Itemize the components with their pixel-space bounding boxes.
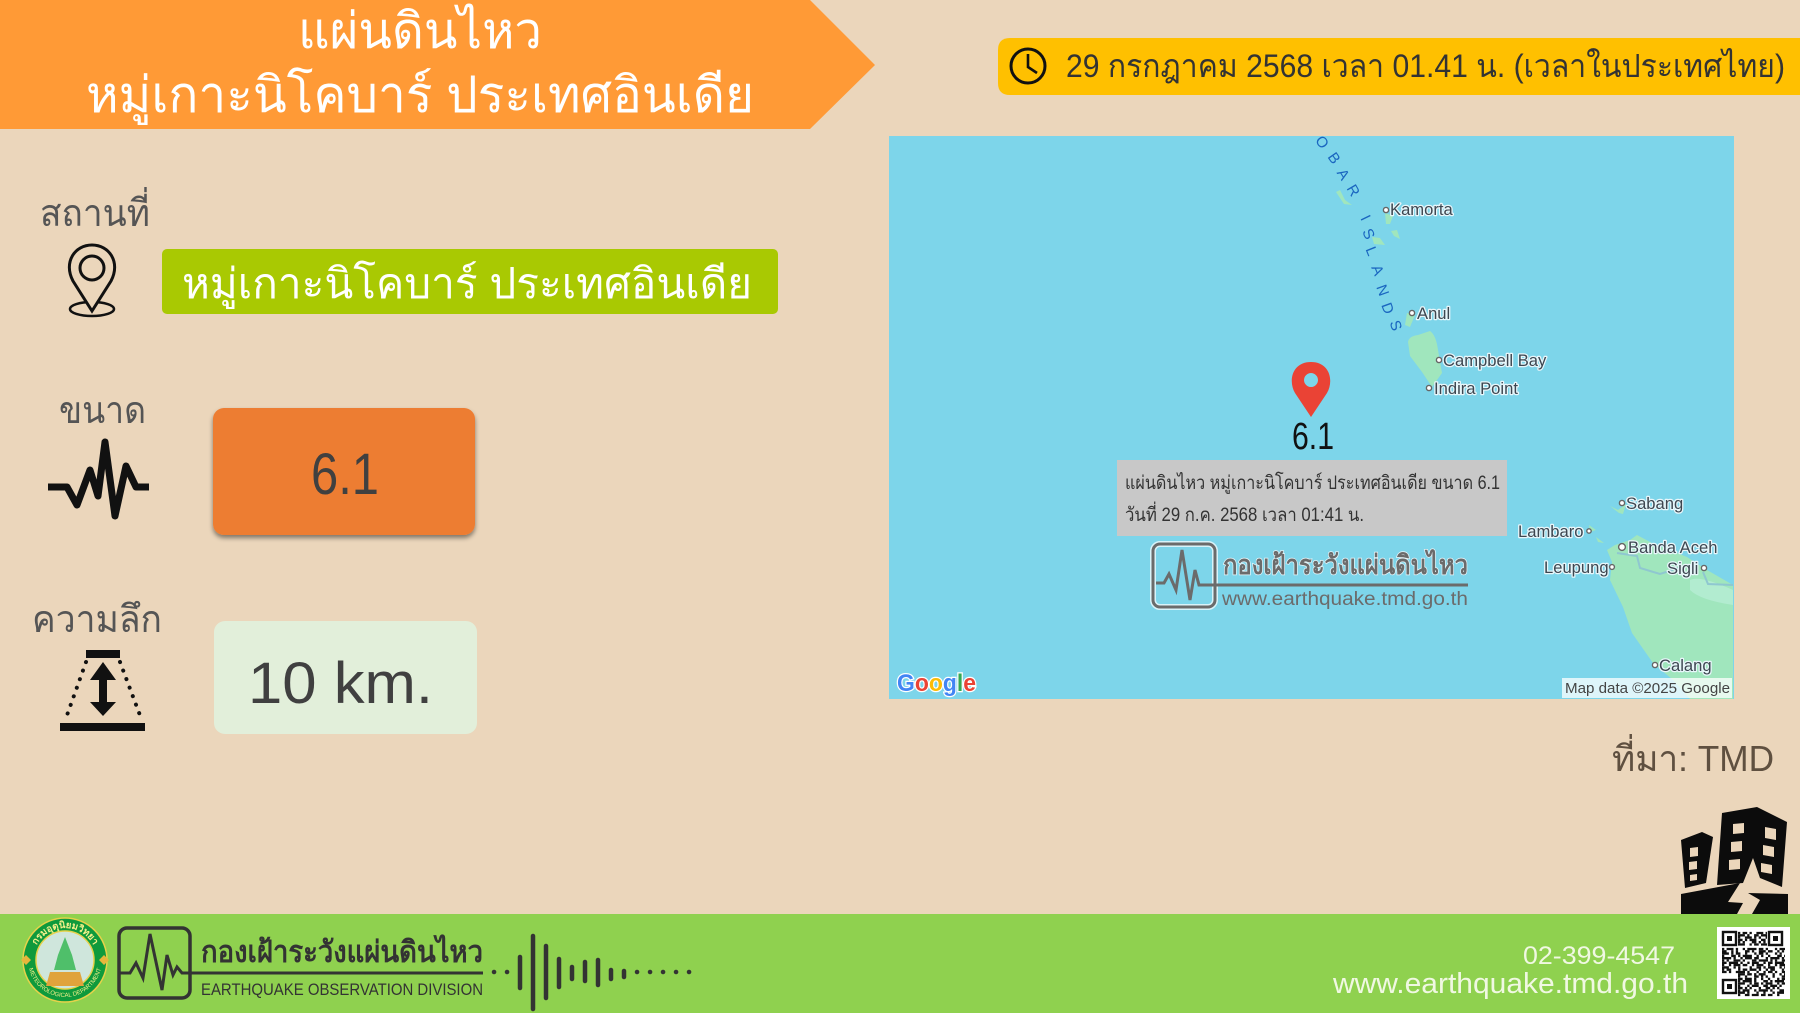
- map watermark logo: www.earthquake.tmd.go.th: [1221, 589, 1468, 610]
- label: Nicobar Islands arc: L: [1362, 244, 1381, 258]
- icon: collapsed building: [1681, 807, 1788, 914]
- place labels: Calang: [1659, 656, 1712, 675]
- google logo: Google: [897, 670, 976, 697]
- phone number: 02-399-4547: [1523, 942, 1675, 970]
- magnitude value: 6.1: [311, 442, 379, 507]
- map watermark logo: กองเฝ้าระวังแผ่นดินไหว: [1223, 549, 1468, 580]
- icon: earthquake pin: [1292, 362, 1330, 417]
- place labels: Lambaro: [1518, 522, 1584, 541]
- place labels: Anul: [1417, 304, 1450, 323]
- depth value: 10 km.: [248, 651, 433, 716]
- place labels: Sigli: [1667, 559, 1698, 578]
- icon: seismic wave: [48, 442, 149, 516]
- place labels: Leupung: [1544, 558, 1609, 577]
- title banner: [0, 0, 875, 129]
- map panel: [889, 133, 1734, 699]
- label: Nicobar Islands arc: S: [1386, 318, 1405, 333]
- magnitude on map: 6.1: [1292, 416, 1334, 458]
- depth label: ความลึก: [32, 599, 162, 641]
- place labels: Indira Point: [1434, 379, 1518, 398]
- callout: วันที่ 29 ก.ค. 2568 เวลา 01:41 น.: [1125, 501, 1364, 526]
- callout: แผ่นดินไหว หมู่เกาะนิโคบาร์ ประเทศอินเดีย ขนาด 6.1: [1125, 471, 1500, 494]
- logo: meteorological department seal: METEOROLOGICAL DEPARTMENT: [29, 968, 101, 997]
- title banner: หมู่เกาะนิโคบาร์ ประเทศอินเดีย: [86, 67, 754, 125]
- label: Nicobar Islands arc: S: [1358, 226, 1378, 242]
- location value: หมู่เกาะนิโคบาร์ ประเทศอินเดีย: [182, 259, 752, 309]
- logo: meteorological department seal: กรมอุตุนิยมวิทยา: [32, 920, 98, 945]
- place labels: Kamorta: [1390, 200, 1453, 219]
- website: www.earthquake.tmd.go.th: [1332, 968, 1688, 1000]
- icon: location pin: [69, 245, 115, 316]
- date and time bar: [998, 38, 1800, 95]
- place labels: Banda Aceh: [1628, 538, 1718, 557]
- title banner: แผ่นดินไหว: [298, 3, 542, 59]
- depth value: [214, 621, 477, 734]
- magnitude value: [213, 408, 475, 535]
- label: Nicobar Islands arc: [1311, 133, 1405, 333]
- place dots: [1383, 207, 1707, 668]
- logo: meteorological department seal: [21, 917, 109, 1003]
- label: Nicobar Islands arc: A: [1333, 166, 1353, 183]
- land masses: [1336, 190, 1733, 699]
- callout: [1117, 460, 1507, 536]
- magnitude label: ขนาด: [59, 390, 146, 432]
- label: Nicobar Islands arc: D: [1377, 300, 1397, 317]
- place labels: Sabang: [1626, 494, 1683, 513]
- source text: ที่มา: TMD: [1612, 734, 1774, 779]
- logo: earthquake observation division: EARTHQUAKE OBSERVATION DIVISION: [201, 981, 483, 999]
- icon: depth: [60, 650, 145, 731]
- sound wave decoration: [494, 936, 689, 1009]
- logo: earthquake observation division: กองเฝ้าระวังแผ่นดินไหว: [201, 934, 483, 969]
- label: Nicobar Islands arc: N: [1372, 282, 1392, 298]
- logo: earthquake observation division: [119, 928, 483, 999]
- QR code: [1717, 927, 1790, 999]
- map watermark logo: [1153, 544, 1468, 610]
- location value: [162, 249, 778, 314]
- place labels: Campbell Bay: [1443, 351, 1547, 370]
- label: Nicobar Islands arc: R: [1343, 182, 1363, 200]
- location label: สถานที่: [40, 187, 150, 235]
- label: Nicobar Islands arc: B: [1324, 149, 1344, 167]
- map attribution: Map data ©2025 Google: [1565, 680, 1730, 697]
- footer band: [0, 914, 1800, 1013]
- label: Nicobar Islands arc: I: [1356, 212, 1374, 224]
- place labels: [1390, 200, 1718, 675]
- label: Nicobar Islands arc: O: [1311, 133, 1332, 152]
- label: Nicobar Islands arc: A: [1367, 262, 1387, 278]
